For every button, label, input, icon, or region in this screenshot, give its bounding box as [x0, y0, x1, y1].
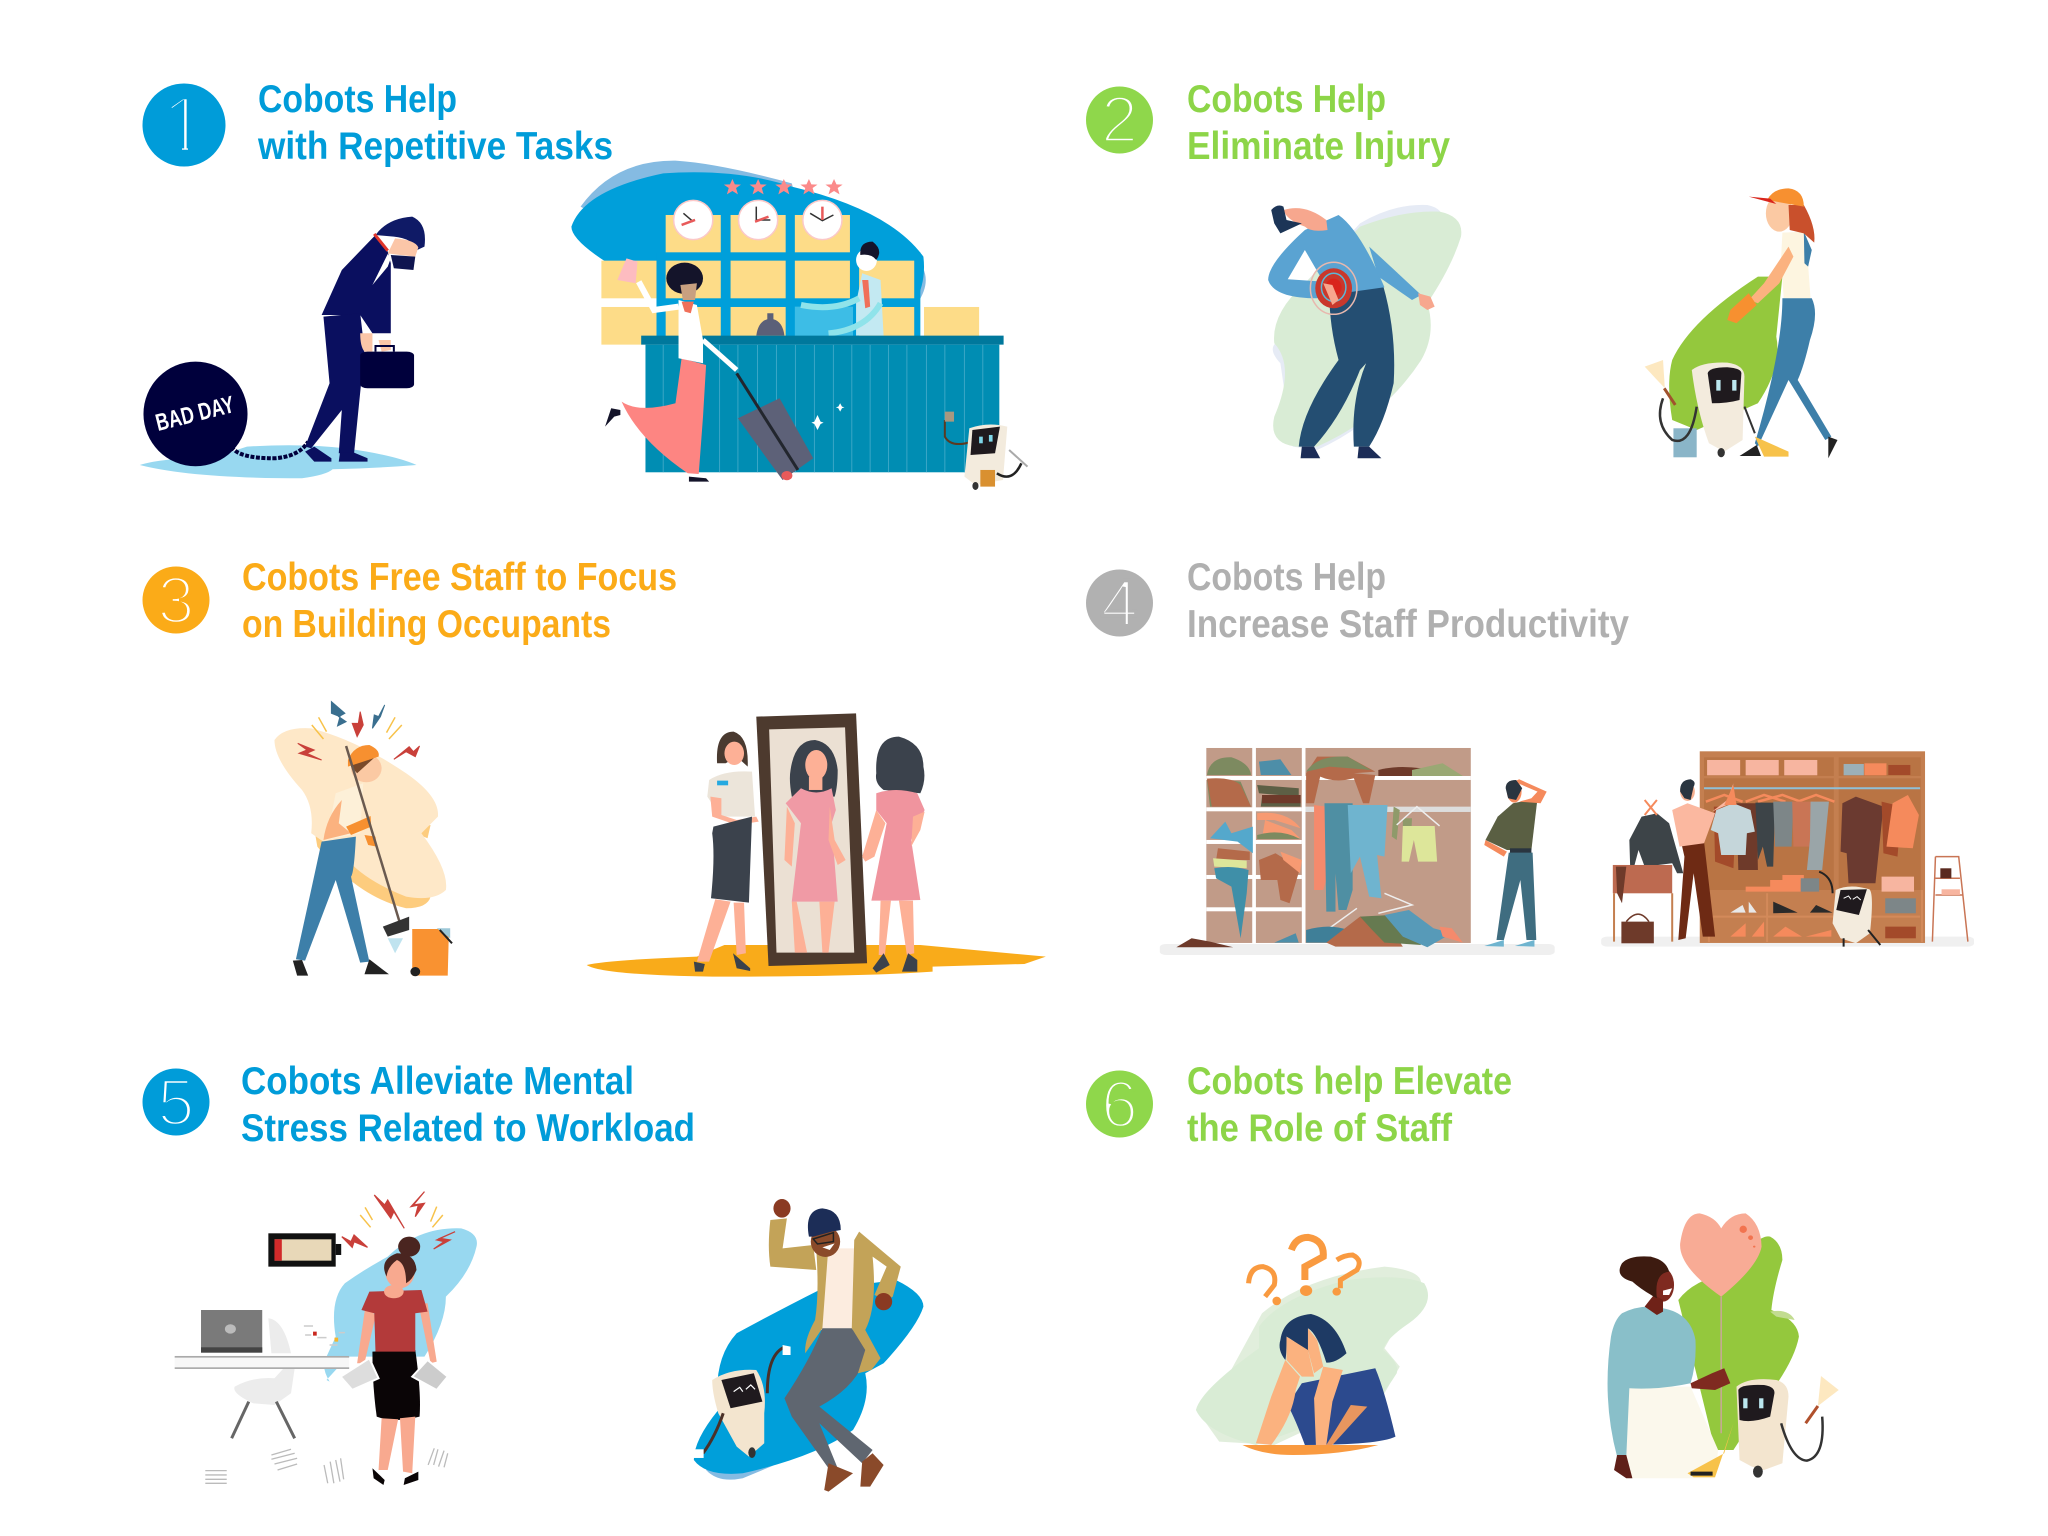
number badge 5: 5: [158, 1065, 194, 1139]
heading 1: Cobots Help: [258, 78, 457, 121]
illustration: woman with heart balloon and robot: [1608, 1213, 1839, 1478]
number badge 2: [1086, 82, 1153, 156]
heading 2: Eliminate Injury: [1187, 125, 1450, 168]
heading 6: the Role of Staff: [1187, 1107, 1453, 1150]
number badge 5: [142, 1065, 210, 1139]
heading 1: with Repetitive Tasks: [257, 125, 613, 168]
heading 3: on Building Occupants: [242, 603, 611, 646]
panel 1: repetitive tasks: [140, 78, 1027, 490]
heading 6: Cobots help Elevate: [1187, 1060, 1512, 1103]
number badge 1: 1: [162, 80, 206, 169]
heading 1: [257, 78, 613, 168]
heading 4: [1187, 556, 1629, 646]
heading 2: Cobots Help: [1187, 78, 1386, 121]
number badge 4: 4: [1101, 566, 1138, 640]
illustration: stressed office worker: [175, 1192, 477, 1485]
number badge 6: 6: [1101, 1067, 1138, 1141]
heading 4: Cobots Help: [1187, 556, 1386, 599]
heading 3: Cobots Free Staff to Focus: [242, 556, 677, 599]
number badge 3: 3: [158, 563, 194, 637]
illustration: tidy wardrobe with robot: [1601, 751, 1974, 947]
number badge 6: [1086, 1067, 1153, 1141]
number badge 1: [142, 80, 226, 169]
heading 5: Cobots Alleviate Mental: [241, 1060, 634, 1103]
heading 5: Stress Related to Workload: [241, 1107, 695, 1150]
heading 3: [242, 556, 677, 646]
number badge 4: [1086, 566, 1153, 640]
illustration: happy man with robot: [693, 1199, 923, 1492]
number badge 2: 2: [1101, 82, 1138, 156]
panel 6: elevate role of staff: [1086, 1060, 1839, 1478]
illustration: stressed cleaner: [274, 702, 452, 976]
illustration: messy wardrobe: [1160, 748, 1555, 955]
illustration: injured man: [1268, 188, 1837, 458]
bad day ball label: BAD DAY: [153, 391, 237, 437]
panel 4: staff productivity: [1086, 556, 1974, 955]
heading 5: [241, 1060, 695, 1150]
number badge 3: [142, 563, 210, 637]
heading 2: [1187, 78, 1450, 168]
illustration: businessman chained to ball: [140, 217, 425, 478]
panel 3: focus on occupants: [142, 556, 1046, 977]
panel 5: mental stress: [142, 1060, 923, 1492]
illustration: worried woman: [1196, 1237, 1428, 1455]
panel 2: eliminate injury: [1086, 78, 1837, 458]
heading 4: Increase Staff Productivity: [1187, 603, 1629, 646]
illustration: mirror and women: [587, 713, 1046, 977]
heading 6: [1187, 1060, 1512, 1150]
illustration: hotel reception: [571, 161, 1027, 490]
